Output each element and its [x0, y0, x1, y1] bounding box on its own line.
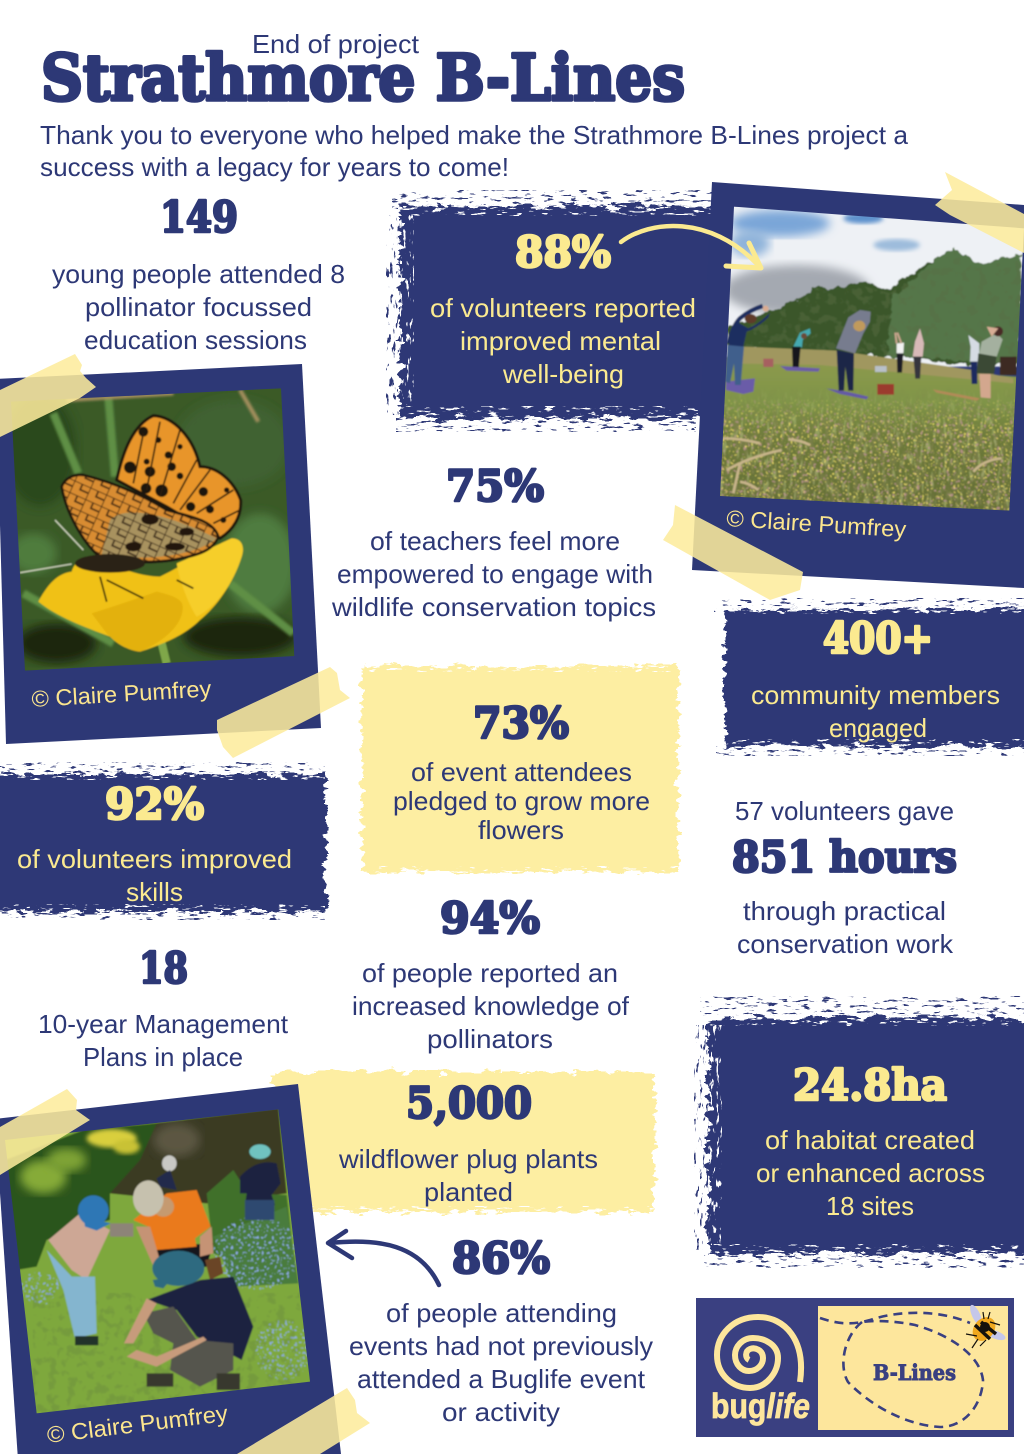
logo: B-Lines wordmark: B-Lines: [873, 1360, 956, 1385]
stat: 851 hours: 851 hours: [732, 833, 957, 883]
stat: 86% new attendees: events had not previously: [349, 1331, 653, 1361]
figure: person 3: [826, 310, 871, 399]
title: main heading: Strathmore B-Lines: [41, 41, 685, 116]
panel: 400+ community members: community members: [751, 680, 1000, 710]
stat: 149 young people: pollinator focussed: [85, 292, 312, 322]
stat: 18 management plans: 10-year Management: [38, 1009, 289, 1039]
text: 5,000 plug plants: [338, 1079, 598, 1207]
text: 5,000 plug plants: wildflower plug plants: [338, 1144, 598, 1174]
stat: 86% new attendees: or activity: [442, 1397, 560, 1427]
stat: 149 young people: young people attended 8: [52, 259, 345, 289]
tape: bottom left: [663, 505, 803, 600]
panel: 73% event attendees: 73%: [473, 699, 569, 749]
stat: 851 hours: 57 volunteers gave: [735, 796, 954, 826]
frame: [0, 364, 321, 744]
logo: spiral: [717, 1317, 801, 1388]
text: 5,000 plug plants: 5,000: [406, 1079, 532, 1129]
intro text: [40, 120, 909, 182]
text: 88% stat: [430, 228, 696, 389]
photo: butterfly on buttercup: [0, 383, 300, 677]
stat: 86% new attendees: attended a Buglife event: [357, 1364, 646, 1394]
stat: 18 management plans: [38, 944, 289, 1072]
figure: person 6: [968, 335, 979, 384]
stat: 94% pollinators: increased knowledge of: [352, 991, 630, 1021]
stat: 94% pollinators: [352, 894, 630, 1054]
title: [41, 29, 685, 116]
panel: 92% volunteers skills: [0, 762, 326, 920]
stat: 851 hours: [732, 796, 957, 959]
figure: person 5: [913, 328, 924, 379]
tape: bottom right: [217, 667, 350, 758]
stat: 75% teachers: empowered to engage with: [337, 559, 653, 589]
stat: 86% new attendees: 86%: [452, 1234, 550, 1284]
trees: [727, 247, 1022, 363]
panel: 88% navy brush block: [386, 190, 732, 432]
photo frame: group looking at plants: [0, 1084, 370, 1454]
logo: B-Lines panel: [818, 1306, 1008, 1430]
stat: 75% teachers: [331, 462, 656, 622]
figure: person 4: [895, 333, 904, 373]
tape: bottom right: [237, 1388, 370, 1454]
title: kicker: End of project: [252, 29, 420, 59]
figure: person 7: [977, 326, 1017, 398]
stat: 94% pollinators: of people reported an: [362, 958, 618, 988]
tape: top right: [935, 172, 1024, 253]
intro text: success with a legacy for years to come!: [40, 152, 509, 182]
panel: 73% event attendees: [360, 660, 680, 878]
stat: 94% pollinators: 94%: [440, 894, 540, 944]
frame: [0, 1084, 341, 1454]
arrow: navy to garden photo: [328, 1231, 439, 1285]
panel: 24.8ha habitat: 18 sites: [826, 1191, 914, 1221]
panel: 400+ community members: [714, 598, 1024, 756]
stat: 94% pollinators: pollinators: [427, 1024, 553, 1054]
text: 5,000 plug plants: planted: [424, 1177, 513, 1207]
photo credit: © Claire Pumfrey: [31, 675, 212, 712]
tape: top left: [0, 354, 96, 437]
panel: 73% event attendees: flowers: [478, 815, 564, 845]
stat: 149 young people: education sessions: [84, 325, 307, 355]
figure: woman in orange: [133, 1180, 213, 1273]
panel: 92% volunteers skills: 92%: [105, 780, 204, 830]
figure: person 2: [792, 328, 811, 368]
panel: 92% volunteers skills: skills: [126, 877, 183, 907]
stat: 18 management plans: Plans in place: [83, 1042, 243, 1072]
stat: 86% new attendees: of people attending: [386, 1298, 617, 1328]
photo frame: butterfly: [0, 354, 350, 758]
panel: 24.8ha habitat: [694, 996, 1024, 1268]
frame: [692, 182, 1024, 588]
stat: 18 management plans: 18: [139, 944, 188, 994]
logo: dashed flight path: [820, 1313, 983, 1427]
figure: walking woman and man: [157, 1144, 281, 1220]
arrow: yellow to yoga photo: [621, 226, 761, 268]
photo credit: © Claire Pumfrey: [45, 1400, 230, 1448]
text: 88% stat: 88%: [515, 228, 611, 278]
props: mats and bags: [763, 359, 980, 401]
photo: people stretching in meadow: [717, 200, 1024, 517]
stat: 851 hours: conservation work: [737, 929, 954, 959]
text: 88% stat: improved mental: [460, 326, 661, 356]
panel: 24.8ha habitat: or enhanced across: [756, 1158, 985, 1188]
panel: 400+ community members: 400+: [823, 614, 933, 664]
logo: buglife wordmark: buglife: [711, 1387, 810, 1426]
stat: 149 young people: [52, 193, 345, 355]
stat: 75% teachers: of teachers feel more: [370, 526, 620, 556]
panel: 92% volunteers skills: of volunteers improved: [17, 844, 292, 874]
photo credit: © Claire Pumfrey: [726, 505, 907, 542]
stat: 149 young people: 149: [160, 193, 238, 243]
panel: 24.8ha habitat: of habitat created: [765, 1125, 975, 1155]
text: 88% stat: well-being: [502, 359, 624, 389]
stat: 75% teachers: 75%: [446, 462, 544, 512]
panel: 24.8ha habitat: 24.8ha: [793, 1061, 947, 1111]
figure: crouching man: [124, 1251, 253, 1390]
text: 88% stat: of volunteers reported: [430, 293, 696, 323]
icon: bumblebee: [966, 1303, 1007, 1348]
figure: woman in cap: [47, 1195, 111, 1345]
photo frame: yoga in meadow: [663, 172, 1024, 600]
figure: person 1: [725, 306, 770, 394]
panel: yellow brush block 5,000: [272, 1072, 654, 1216]
stat: 851 hours: through practical: [743, 896, 946, 926]
stat: 75% teachers: wildlife conservation topics: [331, 592, 656, 622]
panel: 73% event attendees: of event attendees: [411, 757, 632, 787]
tape: top left: [0, 1089, 90, 1175]
intro text: Thank you to everyone who helped make the Strathmore B-Lines project a: [40, 120, 909, 150]
photo: volunteers in garden: [0, 1107, 317, 1417]
panel: 400+ community members: engaged: [829, 713, 927, 743]
panel: 73% event attendees: pledged to grow more: [393, 786, 650, 816]
stat: 86% new attendees: [349, 1234, 653, 1427]
logo: Buglife and B-Lines: [696, 1298, 1014, 1437]
